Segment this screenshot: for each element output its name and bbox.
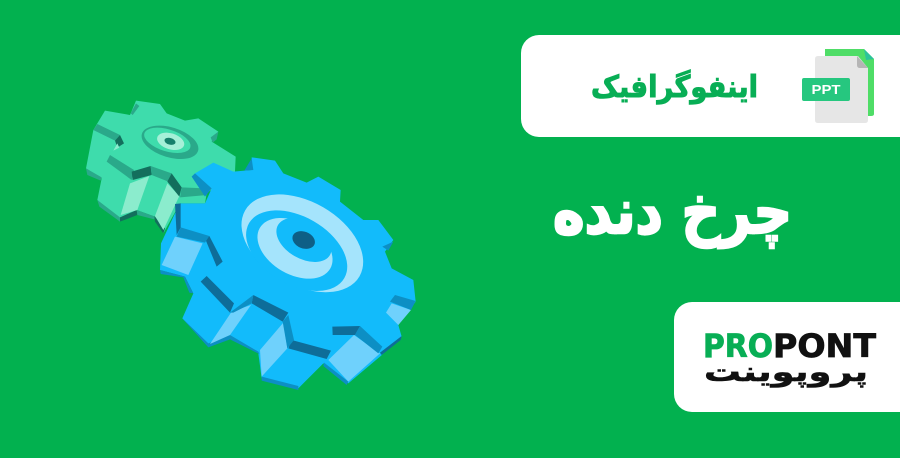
icon: green gear — [86, 101, 236, 233]
logo wordmark: پروپوینت — [704, 357, 868, 388]
icon: blue gear — [160, 157, 416, 390]
logo wordmark: PRO — [703, 327, 773, 365]
icon: PPT file: PPT — [812, 83, 841, 97]
badge text: اینفوگرافیک — [591, 69, 758, 105]
logo wordmark: PONT — [773, 327, 876, 365]
icon: PPT file — [802, 49, 874, 123]
logo wordmark — [703, 327, 876, 388]
title: چرخ دنده — [553, 175, 792, 248]
panel: logo — [674, 302, 900, 412]
panel: infographic badge — [521, 35, 900, 137]
